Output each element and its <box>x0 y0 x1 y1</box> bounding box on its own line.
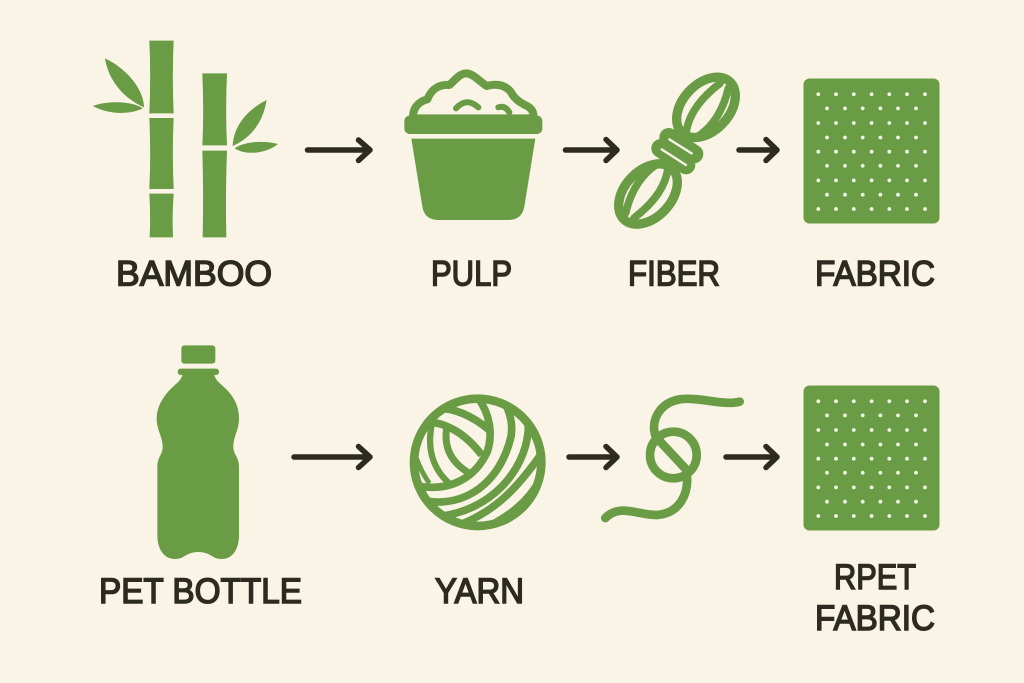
icon: yarn ball <box>414 398 542 527</box>
label: PET bottle: PET BOTTLE <box>99 572 302 611</box>
label: rPET fabric: RPET <box>834 558 916 597</box>
arrow: bottle to yarn <box>294 446 370 468</box>
arrow: yarn to thread <box>569 446 617 468</box>
label: rPET fabric: FABRIC <box>815 599 935 638</box>
arrow: pulp to fiber <box>566 140 617 160</box>
label: yarn: YARN <box>435 572 524 611</box>
icon: pulp bucket <box>404 73 542 220</box>
icon: bamboo <box>93 41 278 237</box>
label: bamboo: BAMBOO <box>116 254 272 294</box>
icon: fiber hank <box>607 66 747 236</box>
icon: PET bottle <box>157 345 239 559</box>
label: rPET fabric <box>815 558 935 638</box>
label: pulp: PULP <box>431 254 512 294</box>
icon: rPET fabric swatch <box>804 386 940 530</box>
icon: fabric swatch <box>804 78 940 224</box>
infographic canvas <box>92 40 940 631</box>
arrow: thread to rPET fabric <box>726 446 777 468</box>
label: fabric: FABRIC <box>815 254 935 294</box>
icon: thread <box>605 399 740 518</box>
arrow: bamboo to pulp <box>308 140 370 160</box>
arrow: fiber to fabric <box>739 140 777 160</box>
label: fiber: FIBER <box>628 254 720 294</box>
